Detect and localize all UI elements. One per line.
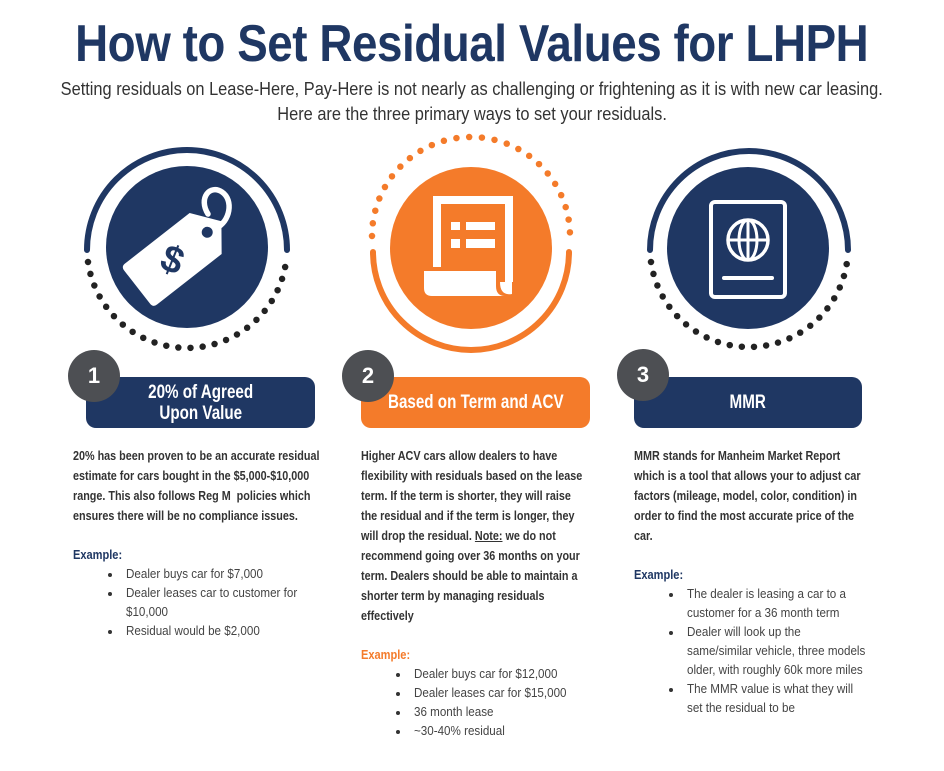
text block 1 [73, 448, 319, 638]
text block 1: 20% has been proven to be an accurate residual [73, 448, 319, 463]
text block 3: older, with roughly 60k more miles [687, 663, 863, 677]
number badge 2 [342, 350, 394, 402]
text block 3: The dealer is leasing a car to a [687, 587, 846, 601]
text block 2: effectively [361, 608, 414, 623]
text block 3: Dealer will look up the [687, 625, 801, 639]
text block 3: The MMR value is what they will [687, 682, 853, 696]
icon graphics [84, 134, 851, 353]
text block 2 [361, 448, 582, 738]
icon: document circle [372, 137, 570, 350]
text block 3: car. [634, 528, 653, 543]
text block 2: Higher ACV cars allow dealers to have [361, 448, 557, 463]
text block 2: the residual and if the term is longer, they [361, 508, 574, 523]
text block 3: factors (mileage, model, color, condition) in [634, 488, 857, 503]
heading bar 3 [634, 377, 862, 428]
text block 2: flexibility with residuals based on the lease [361, 468, 582, 483]
text block 2: term. If the term is shorter, they will raise [361, 488, 571, 503]
text block 2: Dealer leases car for $15,000 [414, 686, 567, 700]
text block 3: set the residual to be [687, 701, 795, 715]
text block 2: ~30-40% residual [414, 724, 505, 738]
text block 3: Example: [634, 567, 683, 582]
text block 2: Dealer buys car for $12,000 [414, 667, 557, 681]
text block 3: order to find the most accurate price of the [634, 508, 854, 523]
text block 2: Example: [361, 647, 410, 662]
text block 2: shorter term by managing residuals [361, 588, 544, 603]
heading bar 1: Upon Value [159, 402, 242, 424]
heading bar 2 [361, 377, 590, 428]
icon: price tag circle: $ [155, 237, 190, 284]
heading bar 1: 20% of Agreed [148, 382, 253, 402]
text block 1: Dealer buys car for $7,000 [126, 567, 263, 581]
title: How to Set Residual Values for LHPH [75, 15, 869, 73]
text block 2: term. Dealers should be able to maintain a [361, 568, 577, 583]
subtitle: Setting residuals on Lease-Here, Pay-Here is not nearly as challenging or frightening as it is with new car leasing. [61, 79, 883, 99]
text block 1: Residual would be $2,000 [126, 624, 260, 638]
heading bar 3: MMR [730, 392, 766, 413]
number badge 2: 2 [362, 363, 374, 388]
subtitle: Here are the three primary ways to set your residuals. [277, 104, 667, 124]
number badge 1: 1 [88, 363, 100, 388]
text block 2: will drop the residual. Note: we do not [361, 528, 556, 543]
number badge 3 [617, 349, 669, 401]
heading bar 1 [86, 377, 315, 428]
text block 1: ensures there will be no compliance issues. [73, 508, 298, 523]
heading bar 2: Based on Term and ACV [388, 392, 563, 413]
subtitle [61, 79, 883, 124]
text block 3: same/similar vehicle, three models [687, 644, 865, 658]
text block 1: Example: [73, 547, 122, 562]
number badge 3: 3 [637, 362, 649, 387]
text block 3: customer for a 36 month term [687, 606, 839, 620]
text block 1: Dealer leases car to customer for [126, 586, 297, 600]
text block 3: which is a tool that allows your to adjust car [634, 468, 861, 483]
text block 2: recommend going over 36 months on your [361, 548, 580, 563]
icon: price tag circle [87, 150, 287, 348]
text block 3: MMR stands for Manheim Market Report [634, 448, 840, 463]
text block 3 [634, 448, 865, 715]
text block 1: range. This also follows Reg M policies which [73, 488, 310, 503]
text block 1: estimate for cars bought in the $5,000-$10,000 [73, 468, 309, 483]
icon: passport circle [650, 151, 848, 347]
number badge 1 [68, 350, 120, 402]
text block 1: $10,000 [126, 605, 168, 619]
text block 2: 36 month lease [414, 705, 494, 719]
